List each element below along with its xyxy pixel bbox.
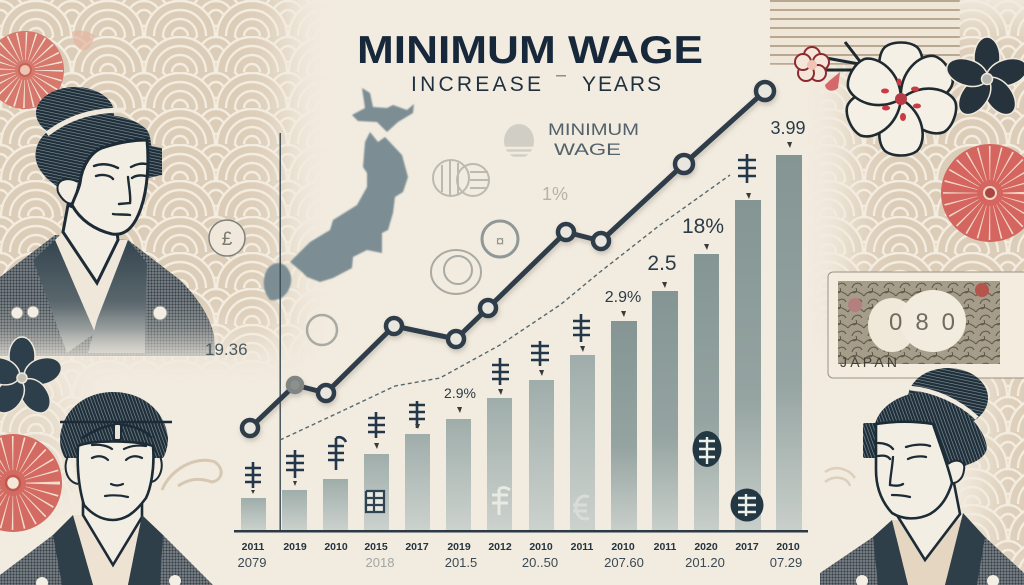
figure: top-left person: [0, 87, 218, 357]
hair bun: [36, 87, 114, 139]
x-axis years row 1: 2010: [529, 541, 553, 553]
facial features: [94, 164, 146, 215]
small faint wave icon: [162, 460, 221, 490]
coin: pound in circle: [209, 220, 245, 256]
x-axis years row 2: 07.29: [770, 555, 802, 570]
x-axis years row 1: 2020: [694, 541, 718, 553]
face: [78, 442, 153, 520]
inline label: minimum wage: MINIMUM: [548, 120, 639, 139]
kimono body: [0, 235, 215, 356]
baseline axis: [234, 530, 808, 532]
yen marks above bars: [245, 154, 756, 488]
faint coins: [307, 124, 534, 345]
value labels: 2.9%: [605, 289, 641, 306]
dashed trend line: [280, 175, 730, 440]
icon: small red-outlined flower: [795, 47, 840, 91]
x-axis years row 1: [242, 541, 800, 553]
face: [72, 140, 148, 234]
markers above bars: [251, 142, 792, 494]
ears: [66, 456, 162, 484]
x-axis years row 1: 2011: [654, 541, 677, 553]
subtitle: [411, 73, 661, 96]
kimono body: [0, 535, 213, 585]
neck: [895, 478, 960, 560]
blossom centre: [895, 93, 907, 105]
icon: right red flower: [941, 144, 1024, 242]
bar chart: [234, 118, 808, 570]
icon: faint flower top-left: [72, 30, 95, 50]
background: top-right stripes: [770, 0, 960, 65]
x-axis years row 2: 207.60: [604, 555, 644, 570]
lapels: [873, 520, 908, 585]
value labels: 2.5: [647, 252, 677, 275]
value labels: 18%: [682, 215, 724, 238]
headband: [60, 422, 172, 438]
x-axis years row 1: 2011: [242, 541, 265, 553]
buttons: [856, 575, 999, 585]
axis marker line: [280, 133, 281, 531]
coin: lower ring: [431, 250, 481, 294]
x-axis years row 2: 201.20: [685, 555, 725, 570]
x-axis years row 2: 2018: [366, 555, 394, 570]
note ovals: [868, 298, 916, 352]
x-axis years row 1: 2017: [405, 541, 429, 553]
facial features: [878, 443, 930, 497]
hair bun: [908, 368, 988, 428]
lapels: [33, 240, 95, 353]
value labels: 3.99: [770, 118, 806, 138]
bars: [241, 155, 802, 531]
kimono body: [820, 537, 1024, 585]
icon: top-left red flower: [0, 31, 64, 109]
hair: [875, 392, 987, 474]
inline label: minimum wage: [548, 120, 639, 159]
facial features: [92, 445, 146, 497]
x-axis years row 1: 2019: [447, 541, 471, 553]
neck: [63, 205, 118, 283]
headband: [910, 388, 977, 418]
icon: lower-left dark flower: [0, 337, 65, 419]
hair: [35, 115, 162, 195]
currency marks on bars: [366, 431, 764, 522]
coin: top striped: [504, 124, 534, 158]
x-axis years row 1: 2019: [283, 541, 307, 553]
inner collar: [55, 232, 128, 333]
x-axis years row 2: 201.5: [445, 555, 477, 570]
x-axis years row 1: 2015: [364, 541, 388, 553]
x-axis years row 1: 2010: [776, 541, 800, 553]
title: MINIMUM WAGE: [357, 29, 703, 72]
line chart: [242, 82, 774, 436]
banknote: [828, 272, 1024, 378]
lapels: [53, 515, 93, 585]
subtitle: INCREASE: [411, 73, 541, 96]
x-axis years row 1: 2017: [735, 541, 759, 553]
figure: bottom-right person: [820, 368, 1024, 585]
note value: 0 8 0: [889, 309, 955, 336]
icon: dark navy flower: [943, 37, 1024, 121]
icon: large white blossom: [841, 42, 962, 156]
icon: lower-left red flower: [0, 434, 62, 532]
note face: [838, 281, 1000, 364]
headband: [47, 110, 125, 134]
coin: small lower left: [307, 315, 337, 345]
x-axis years row 2: 20..50: [522, 555, 558, 570]
coin: pound in circle: £: [222, 229, 233, 250]
inner collar: [892, 520, 963, 585]
x-axis years row 1: 2010: [611, 541, 635, 553]
faint number: 1%: [542, 184, 568, 204]
inline label: minimum wage: WAGE: [554, 140, 621, 159]
x-axis years row 1: 2012: [488, 541, 512, 553]
ear: [948, 461, 964, 483]
value labels: [444, 118, 806, 401]
coin: mid ring: ¤: [496, 233, 504, 250]
hair: [60, 392, 168, 458]
ear: [58, 179, 78, 203]
note label: JAPAN: [840, 354, 897, 370]
x-axis years row 1: 2011: [571, 541, 594, 553]
x-axis years row 1: 2010: [324, 541, 348, 553]
left value label: 19.36: [205, 340, 248, 359]
value labels: 2.9%: [444, 385, 476, 401]
x-axis years row 2: [238, 555, 802, 570]
x-axis years row 2: 2079: [238, 555, 266, 570]
note frame: [828, 272, 1024, 378]
headband knot: [114, 424, 121, 440]
icon: map of Japan: [264, 88, 414, 300]
side tuft: [863, 423, 877, 458]
figure: bottom-left person: [0, 392, 213, 585]
coin: striped pair: [433, 160, 489, 196]
coin: mid ring: [482, 221, 518, 257]
fade: [0, 300, 218, 357]
kimono buttons: [11, 306, 167, 320]
inner collar: [73, 515, 142, 585]
note colour accents: [848, 283, 989, 312]
buttons: [36, 575, 181, 585]
data points: [242, 82, 774, 436]
faint wave near bottom-right figure: [825, 468, 855, 486]
subtitle: YEARS: [582, 73, 661, 96]
flower stems: [826, 42, 872, 70]
neck: [83, 495, 142, 565]
face: [876, 422, 952, 518]
